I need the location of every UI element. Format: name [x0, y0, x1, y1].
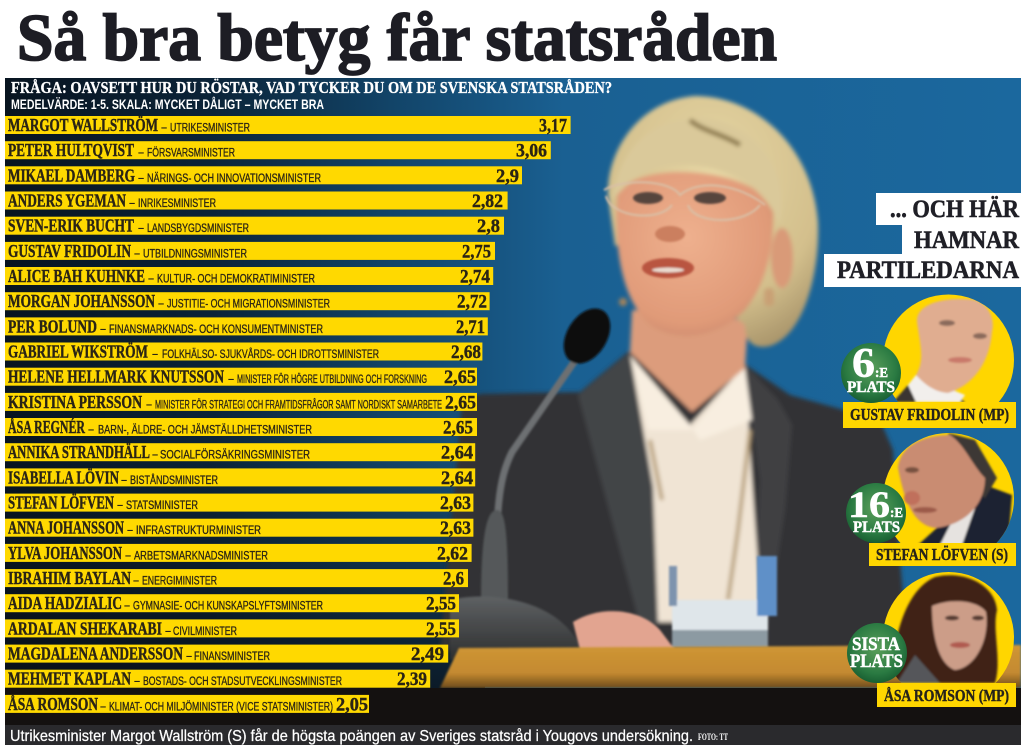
bar: Anders Ygeman: –: [129, 198, 135, 210]
bar: Magdalena Andersson: FINANSMINISTER: [194, 651, 270, 663]
bar: Margot Wallström: MARGOT WALLSTRÖM: [8, 115, 158, 135]
bar: Mehmet Kaplan: [5, 669, 430, 690]
microphone: [450, 300, 620, 660]
bar: Mehmet Kaplan: BOSTADS- OCH STADSUTVECKLINGSMINISTER: [143, 676, 342, 688]
bar: Morgan Johansson: –: [158, 298, 164, 310]
bar: Anders Ygeman: [5, 190, 508, 212]
bar: Anna Johansson: INFRASTRUKTURMINISTER: [136, 525, 261, 537]
bar: Margot Wallström: –: [161, 122, 167, 134]
bar: Åsa Regnér: BARN-, ÄLDRE- OCH JÄMSTÄLLDHETSMINISTER: [98, 424, 312, 436]
bar: Mikael Damberg: NÄRINGS- OCH INNOVATIONSMINISTER: [147, 173, 321, 185]
bar: Annika Strandhäll: –: [152, 449, 158, 461]
bar: Ardalan Shekarabi: 2,55: [426, 619, 456, 640]
bar: Margot Wallström: UTRIKESMINISTER: [170, 122, 250, 134]
bar: Gustav Fridolin: GUSTAV FRIDOLIN: [8, 241, 131, 261]
bar: Isabella Lövin: 2,64: [441, 468, 473, 489]
bar: Helene Hellmark Knutsson: –: [228, 374, 234, 386]
bar: Åsa Regnér: –: [88, 424, 94, 436]
bar: Sven-Erik Bucht: SVEN-ERIK BUCHT: [8, 216, 134, 236]
bar: Ylva Johansson: [5, 543, 472, 564]
bar: Aida Hadzialic: –: [124, 600, 130, 612]
bar: Peter Hultqvist: [5, 140, 551, 162]
bar: Magdalena Andersson: –: [186, 651, 192, 663]
bar: Morgan Johansson: JUSTITIE- OCH MIGRATIONSMINISTER: [167, 299, 330, 311]
bar: Gustav Fridolin: 2,75: [462, 241, 491, 262]
badge: 6:e plats: [841, 341, 901, 403]
bar: Helene Hellmark Knutsson: 2,65: [444, 367, 476, 388]
bar: Ardalan Shekarabi: CIVILMINISTER: [173, 626, 237, 638]
bar: Ylva Johansson: YLVA JOHANSSON: [8, 543, 122, 563]
bar: Per Bolund: [5, 316, 488, 338]
bar: Åsa Regnér: 2,65: [443, 418, 473, 438]
bar: Sven-Erik Bucht: [5, 216, 504, 237]
bar: Åsa Romson: ÅSA ROMSON: [8, 694, 98, 714]
bar: Magdalena Andersson: [5, 644, 448, 665]
bar: Aida Hadzialic: [5, 593, 459, 615]
bar: Stefan Löfven: –: [117, 500, 123, 512]
bar: Åsa Romson: 2,05: [336, 694, 368, 715]
bar: Isabella Lövin: –: [121, 474, 127, 486]
bar: Stefan Löfven: 2,63: [440, 493, 471, 514]
bar: Alice Bah Kuhnke: KULTUR- OCH DEMOKRATIMINISTER: [157, 274, 315, 286]
scale description: MEDELVÄRDE: 1-5. SKALA: MYCKET DÅLIGT – MYCKET BRA: [11, 96, 324, 112]
bar: Stefan Löfven: [5, 493, 473, 514]
bar: Mikael Damberg: [5, 165, 522, 187]
bar: Ibrahim Baylan: [5, 568, 468, 590]
bar: Gabriel Wikström: GABRIEL WIKSTRÖM: [8, 342, 148, 362]
bar: Mehmet Kaplan: –: [134, 676, 140, 688]
bar: Peter Hultqvist: PETER HULTQVIST: [8, 140, 134, 160]
bar: Ylva Johansson: ARBETSMARKNADSMINISTER: [134, 550, 268, 562]
bar: Per Bolund: 2,71: [456, 317, 485, 338]
bar: Per Bolund: –: [100, 323, 106, 335]
bar: Ibrahim Baylan: ENERGIMINISTER: [142, 576, 217, 588]
caption: Utrikesminister Margot Wallström (S) får de högsta poängen av Sveriges statsråd i Yougovs undersökning.: [10, 727, 693, 745]
bar: Åsa Romson: –: [100, 701, 106, 713]
bar: Alice Bah Kuhnke: [5, 266, 493, 288]
bar: Kristina Persson: KRISTINA PERSSON: [8, 392, 142, 412]
bar: Helene Hellmark Knutsson: HELENE HELLMARK KNUTSSON: [8, 367, 224, 387]
bar: Per Bolund: PER BOLUND: [8, 316, 97, 336]
badge: 16:e plats: 16: [848, 485, 890, 526]
bar: Morgan Johansson: MORGAN JOHANSSON: [8, 291, 155, 311]
bar: Mikael Damberg: MIKAEL DAMBERG: [8, 165, 135, 185]
bar: Annika Strandhäll: ANNIKA STRANDHÄLL: [8, 442, 150, 462]
portrait: Stefan Löfven: [884, 433, 1014, 543]
hand and water glass: [573, 556, 777, 650]
badge: 6:e plats: 6: [852, 341, 875, 387]
bar: Stefan Löfven: STATSMINISTER: [126, 500, 198, 512]
bar: Ylva Johansson: –: [125, 550, 131, 562]
bar: Isabella Lövin: [5, 467, 475, 489]
bar: Sven-Erik Bucht: 2,8: [477, 216, 500, 237]
badge: 6:e plats: :E: [875, 366, 888, 381]
bar: Margot Wallström: 3,17: [539, 116, 567, 136]
bar: Magdalena Andersson: MAGDALENA ANDERSSON: [8, 644, 183, 664]
bar: Ylva Johansson: 2,62: [437, 543, 468, 564]
bar: Magdalena Andersson: 2,49: [411, 644, 444, 665]
badge: sista plats: PLATS: [850, 651, 903, 672]
badge: 16:e plats: :E: [890, 506, 903, 521]
bar: Helene Hellmark Knutsson: [5, 367, 477, 388]
bar: Gustav Fridolin: UTBILDNINGSMINISTER: [143, 248, 247, 260]
bar: Mikael Damberg: 2,9: [496, 166, 519, 187]
portrait: Åsa Romson: [884, 572, 1014, 683]
bar: Alice Bah Kuhnke: –: [148, 273, 154, 285]
portrait: Gustav Fridolin: [884, 294, 1014, 402]
bar: Per Bolund: FINANSMARKNADS- OCH KONSUMENTMINISTER: [109, 324, 323, 336]
bar: Alice Bah Kuhnke: 2,74: [460, 266, 490, 288]
bar: Anders Ygeman: INRIKESMINISTER: [138, 198, 216, 210]
bar: Kristina Persson: MINISTER FÖR STRATEGI OCH FRAMTIDSFRÅGOR SAMT NORDISKT SAMARBETE: [155, 398, 442, 411]
bar: Peter Hultqvist: FÖRSVARSMINISTER: [147, 148, 235, 160]
bar: Gustav Fridolin: [5, 241, 495, 262]
bar: Ibrahim Baylan: 2,6: [443, 569, 464, 590]
bar: Anders Ygeman: 2,82: [472, 191, 503, 212]
photo credit: FOTO: TT: [698, 732, 728, 742]
survey question: FRÅGA: OAVSETT HUR DU RÖSTAR, VAD TYCKER DU OM DE SVENSKA STATSRÅDEN?: [11, 78, 612, 97]
bar: Mehmet Kaplan: MEHMET KAPLAN: [8, 669, 131, 689]
bar: Gustav Fridolin: –: [134, 248, 140, 260]
bar: Kristina Persson: –: [146, 399, 152, 411]
title: Så bra betyg får statsråden: [17, 1, 777, 75]
table: [440, 645, 1021, 688]
bar: Kristina Persson: [5, 392, 477, 413]
bar: Anna Johansson: [5, 518, 473, 539]
bar: Gabriel Wikström: –: [152, 348, 158, 360]
bar: Mikael Damberg: –: [138, 172, 144, 184]
badge: 6:e plats: PLATS: [847, 379, 895, 396]
bar: Kristina Persson: 2,65: [445, 392, 476, 413]
bar: Ibrahim Baylan: –: [133, 575, 139, 587]
badge: sista plats: [847, 623, 907, 683]
bar: Anna Johansson: ANNA JOHANSSON: [8, 518, 124, 538]
bar: Stefan Löfven: STEFAN LÖFVEN: [8, 493, 114, 513]
bar: Alice Bah Kuhnke: ALICE BAH KUHNKE: [8, 266, 145, 286]
bar: Aida Hadzialic: AIDA HADZIALIC: [8, 593, 122, 613]
bar: Morgan Johansson: 2,72: [457, 292, 487, 313]
bar: Peter Hultqvist: 3,06: [516, 141, 547, 162]
bar: Ardalan Shekarabi: [5, 618, 459, 640]
bar: Annika Strandhäll: 2,64: [441, 443, 473, 464]
bar: Sven-Erik Bucht: –: [138, 223, 144, 235]
bar: Annika Strandhäll: [5, 442, 475, 464]
bar: Ardalan Shekarabi: ARDALAN SHEKARABI: [8, 618, 162, 638]
bar: Gabriel Wikström: 2,68: [451, 342, 481, 363]
face features: [604, 182, 765, 278]
badge: 16:e plats: [846, 483, 906, 543]
badge: 16:e plats: PLATS: [853, 519, 900, 536]
bar: Åsa Regnér: [5, 417, 477, 438]
caption band: [5, 725, 1021, 745]
bar: Isabella Lövin: BISTÅNDSMINISTER: [130, 474, 218, 487]
bar: Ardalan Shekarabi: –: [165, 625, 171, 637]
bar: Aida Hadzialic: 2,55: [426, 594, 456, 615]
badge: sista plats: SISTA: [852, 634, 900, 655]
bar: Aida Hadzialic: GYMNASIE- OCH KUNSKAPSLYFTSMINISTER: [133, 601, 323, 613]
bar: Mehmet Kaplan: 2,39: [397, 669, 427, 690]
bar: Anders Ygeman: ANDERS YGEMAN: [8, 190, 126, 210]
bar: Annika Strandhäll: SOCIALFÖRSÄKRINGSMINISTER: [160, 450, 310, 462]
bar: Åsa Regnér: ÅSA REGNÉR: [8, 417, 85, 437]
bar: Helene Hellmark Knutsson: MINISTER FÖR HÖGRE UTBILDNING OCH FORSKNING: [237, 374, 427, 386]
bar: Peter Hultqvist: –: [138, 147, 144, 159]
bar: Anna Johansson: 2,63: [440, 518, 471, 539]
bar chart: ministers ranked: [5, 115, 571, 715]
bar: Sven-Erik Bucht: LANDSBYGDSMINISTER: [147, 223, 249, 235]
bar: Åsa Romson: KLIMAT- OCH MILJÖMINISTER (VICE STATSMINISTER): [109, 701, 333, 713]
label: Gustav Fridolin: [843, 402, 1016, 428]
bar: Åsa Romson: [5, 694, 369, 715]
bar: Margot Wallström: [5, 115, 571, 136]
heading: party leaders: [824, 193, 1021, 287]
bar: Gabriel Wikström: [5, 342, 482, 363]
bar: Gabriel Wikström: FOLKHÄLSO- SJUKVÅRDS- OCH IDROTTSMINISTER: [162, 348, 379, 361]
bar: Anna Johansson: –: [127, 525, 133, 537]
bar: Ibrahim Baylan: IBRAHIM BAYLAN: [8, 568, 131, 588]
bar: Isabella Lövin: ISABELLA LÖVIN: [8, 467, 119, 487]
bar: Morgan Johansson: [5, 291, 490, 313]
